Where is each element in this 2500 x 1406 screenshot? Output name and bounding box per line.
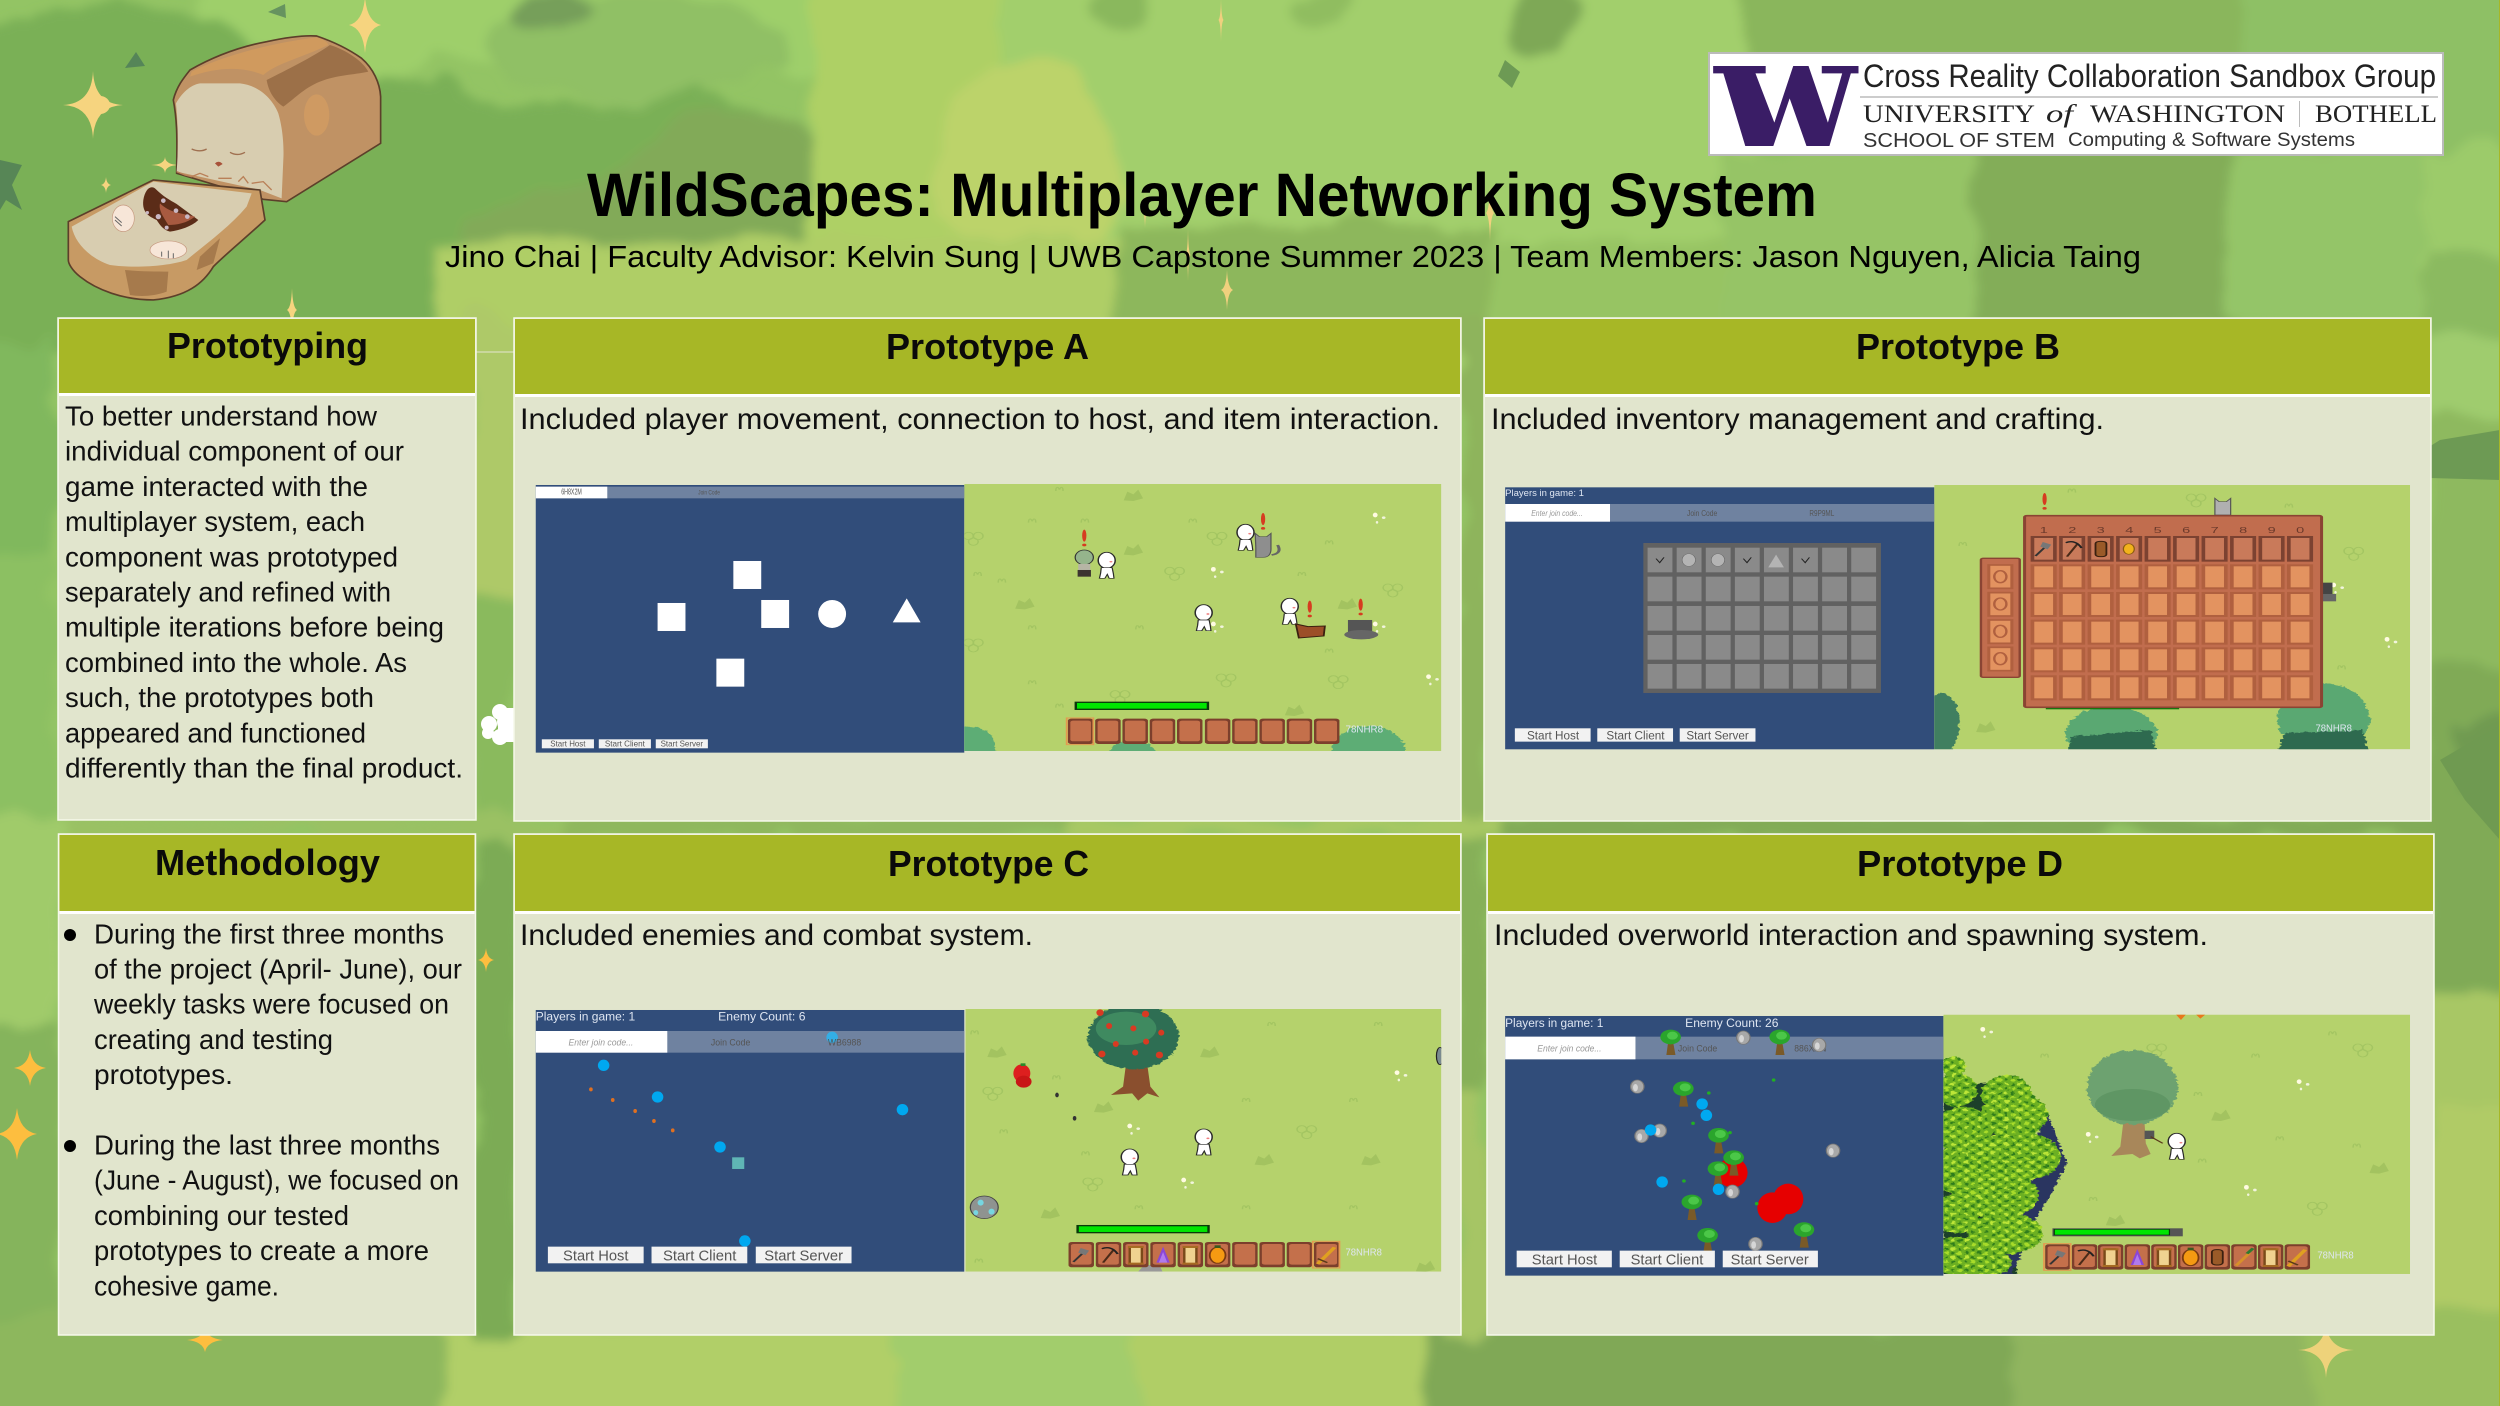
screenshot: Prototype B game views <box>1505 485 2410 760</box>
logo university line: UNIVERSITY <box>1863 101 2035 128</box>
screenshot: debug spawning view <box>1505 1016 1943 1276</box>
panel: Methodology <box>58 834 476 1335</box>
logo university line: BOTHELL <box>2315 101 2437 128</box>
inventory window: 1 <box>2040 526 2048 535</box>
caption: Prototype C: Included enemies and combat system. <box>520 919 1033 952</box>
screenshot: debug combat view: Join Code <box>711 1037 750 1047</box>
dense forest canopy <box>1931 1057 2067 1277</box>
hotbar with items <box>2044 1244 2354 1270</box>
inventory window: 8 <box>2239 526 2248 535</box>
bushes <box>964 726 1406 751</box>
logo heading: Cross Reality Collaboration Sandbox Group <box>1863 58 2436 94</box>
screenshot: debug network view: 6H8X2M <box>561 488 582 497</box>
panel: Prototyping <box>58 318 476 820</box>
screenshot: debug inventory view: Start Server <box>1686 728 1749 742</box>
hotbar with items: 78NHR8 <box>1346 1247 1382 1258</box>
screenshot: debug inventory view: Enter join code... <box>1531 509 1583 518</box>
logo school line: Computing & Software Systems <box>2068 130 2355 151</box>
list: methodology bullets: combining our tested <box>94 1200 349 1231</box>
list: methodology bullets: (June - August), we focused on <box>94 1164 459 1196</box>
screenshot: crafting inventory scene <box>1923 485 2410 760</box>
list: methodology bullets: During the first three months <box>94 918 444 950</box>
white cloud behind panels <box>481 704 517 745</box>
icon: held axe <box>2145 1131 2163 1143</box>
heading: Prototype B: Prototype B <box>1856 326 2060 367</box>
screenshot: debug combat view: Start Client <box>663 1248 736 1264</box>
text block: prototyping description: separately and refined with <box>65 576 391 608</box>
caption: Prototype D: Included overworld interaction and spawning system. <box>1494 919 2208 952</box>
heading: Prototyping: Prototyping <box>167 325 368 366</box>
hotbar with items: 78NHR8 <box>2317 1250 2354 1261</box>
list: methodology bullets: of the project (April- June), our <box>94 954 462 984</box>
list: methodology bullets: prototypes to create a more <box>94 1235 429 1266</box>
screenshot: debug inventory view: Start Client <box>1606 728 1665 742</box>
anvil behind inventory <box>2323 582 2336 602</box>
health bar <box>2052 1228 2183 1236</box>
screenshot: debug inventory view: Players in game: 1 <box>1505 488 1584 498</box>
screenshot: combat game scene <box>965 1004 1444 1272</box>
text block: prototyping description: differently than the final product. <box>65 752 463 784</box>
subtitle: authors and advisor: Jino Chai | Faculty Advisor: Kelvin Sung | UWB Capstone Summer 2023 | Team Members: Jason Nguyen, Alicia Taing <box>445 239 2141 274</box>
inventory window: 2 <box>2068 526 2076 535</box>
text block: prototyping description <box>65 400 463 784</box>
panel: Prototype D <box>1487 834 2434 1335</box>
text block: prototyping description: multiplayer system, each <box>65 506 365 537</box>
screenshot: debug network view <box>536 485 964 753</box>
list: methodology bullets: During the last three months <box>94 1130 440 1160</box>
panel: Prototype B <box>1484 318 2431 821</box>
list: methodology bullets: prototypes. <box>94 1059 233 1090</box>
heading: Prototype C: Prototype C <box>888 843 1089 884</box>
illustration: bread loaf mascot <box>68 36 381 300</box>
heading: Prototype D: Prototype D <box>1857 843 2063 884</box>
screenshot: debug combat view: Start Server <box>764 1248 843 1264</box>
panel: Prototype A <box>514 318 1461 821</box>
screenshot: debug spawning view: Join Code <box>1678 1043 1717 1054</box>
inventory window: 7 <box>2211 526 2219 535</box>
health bar <box>1075 702 1209 710</box>
text block: prototyping description: component was prototyped <box>65 541 398 572</box>
screenshot: debug network view: Start Client <box>605 740 645 749</box>
screenshot: debug combat view: Enter join code... <box>568 1037 633 1047</box>
screenshot: debug combat view <box>536 1010 964 1272</box>
icon: red apple <box>1013 1063 1032 1088</box>
list: methodology bullets: cohesive game. <box>94 1270 279 1302</box>
screenshot: pixel art game scene <box>964 484 1442 751</box>
screenshot: debug inventory view: Join Code <box>1687 509 1717 518</box>
screenshot: debug inventory view <box>1505 487 1934 749</box>
icon: gray cat <box>1255 533 1279 557</box>
screenshot: debug combat view: Enemy Count: 6 <box>718 1010 806 1023</box>
screenshot: debug inventory view: Start Host <box>1527 728 1579 742</box>
screenshot: debug spawning view: Start Host <box>1532 1252 1597 1268</box>
logo university line <box>1863 101 2437 128</box>
screenshot: debug spawning view: Start Server <box>1731 1252 1809 1268</box>
screenshot: Prototype A game views <box>536 484 1441 781</box>
text block: prototyping description: game interacted with the <box>65 471 368 502</box>
inventory window: 4 <box>2125 526 2134 535</box>
logo: UW Bothell Cross Reality Collaboration Sandbox Group <box>1709 53 2443 155</box>
screenshot: debug network view: Join Code <box>698 489 720 496</box>
list: methodology bullets <box>64 918 462 1302</box>
screenshot: debug combat view: Players in game: 1 <box>536 1010 635 1023</box>
logo university line: WASHINGTON <box>2090 101 2285 128</box>
screenshot: Prototype C game views <box>536 1004 1444 1272</box>
logo school line: SCHOOL OF STEM <box>1863 130 2055 152</box>
screenshot: debug inventory view: R9P9ML <box>1809 509 1835 518</box>
inventory window <box>2025 516 2322 707</box>
screenshot: debug network view: Start Host <box>550 740 586 749</box>
screenshot: debug spawning view: Players in game: 1 <box>1505 1016 1603 1030</box>
screenshot: debug combat view: Start Host <box>563 1248 629 1264</box>
heading: Methodology: Methodology <box>155 842 380 883</box>
hotbar with items <box>1069 1241 1382 1268</box>
screenshot: debug spawning view: Enemy Count: 26 <box>1685 1016 1779 1030</box>
text block: prototyping description: combined into the whole. As <box>65 647 407 678</box>
icon: felled oak tree <box>2087 1050 2178 1158</box>
icon: brown crate <box>1296 624 1325 638</box>
screenshot: debug spawning view: Enter join code... <box>1537 1043 1602 1054</box>
inventory window: 3 <box>2097 526 2105 535</box>
trees bushes <box>1934 683 2372 750</box>
caption: Prototype B: Included inventory management and crafting. <box>1491 403 2104 436</box>
gray cat <box>2215 498 2231 515</box>
text block: prototyping description: To better understand how <box>65 400 378 432</box>
logo university line: of <box>2046 101 2077 128</box>
hotbar: 78NHR8 <box>1346 724 1383 735</box>
screenshot: debug spawning view: Start Client <box>1631 1252 1703 1268</box>
equipment side panel <box>1981 558 2020 677</box>
logo school line <box>1863 130 2355 152</box>
inventory window: 9 <box>2268 526 2276 535</box>
inventory window: 5 <box>2154 526 2162 535</box>
screenshot: crafting inventory scene: 78NHR8 <box>2316 723 2352 734</box>
icon: UW W mark <box>1713 66 1858 146</box>
hotbar <box>1067 718 1383 745</box>
screenshot: debug combat view: WB6988 <box>828 1037 861 1047</box>
text block: prototyping description: individual component of our <box>65 436 404 467</box>
list: methodology bullets: weekly tasks were focused on <box>93 988 449 1020</box>
text block: prototyping description: appeared and functioned <box>65 717 366 748</box>
text block: prototyping description: such, the prototypes both <box>65 682 374 713</box>
inventory window: 6 <box>2182 526 2190 535</box>
text block: prototyping description: multiple iterations before being <box>65 612 444 643</box>
inventory window: 0 <box>2296 526 2305 535</box>
icon: apple tree <box>1088 1004 1179 1101</box>
health bar <box>1076 1225 1210 1233</box>
panel: Prototype C <box>514 834 1461 1335</box>
icon: crystal rock <box>970 1196 998 1219</box>
screenshot: overworld game scene <box>1931 1015 2410 1277</box>
screenshot: Prototype D game views <box>1505 1015 2410 1277</box>
screenshot: debug network view: Start Server <box>661 740 703 749</box>
title: WildScapes: Multiplayer Networking System <box>587 161 1817 229</box>
icon: anvil station <box>1344 620 1378 639</box>
caption: Prototype A: Included player movement, connection to host, and item interaction. <box>520 403 1440 436</box>
heading: Prototype A: Prototype A <box>886 326 1089 367</box>
icon: frog NPC <box>1075 550 1093 577</box>
list: methodology bullets: creating and testing <box>94 1024 333 1055</box>
screenshot: debug spawning view: 886XAN <box>1794 1043 1826 1054</box>
